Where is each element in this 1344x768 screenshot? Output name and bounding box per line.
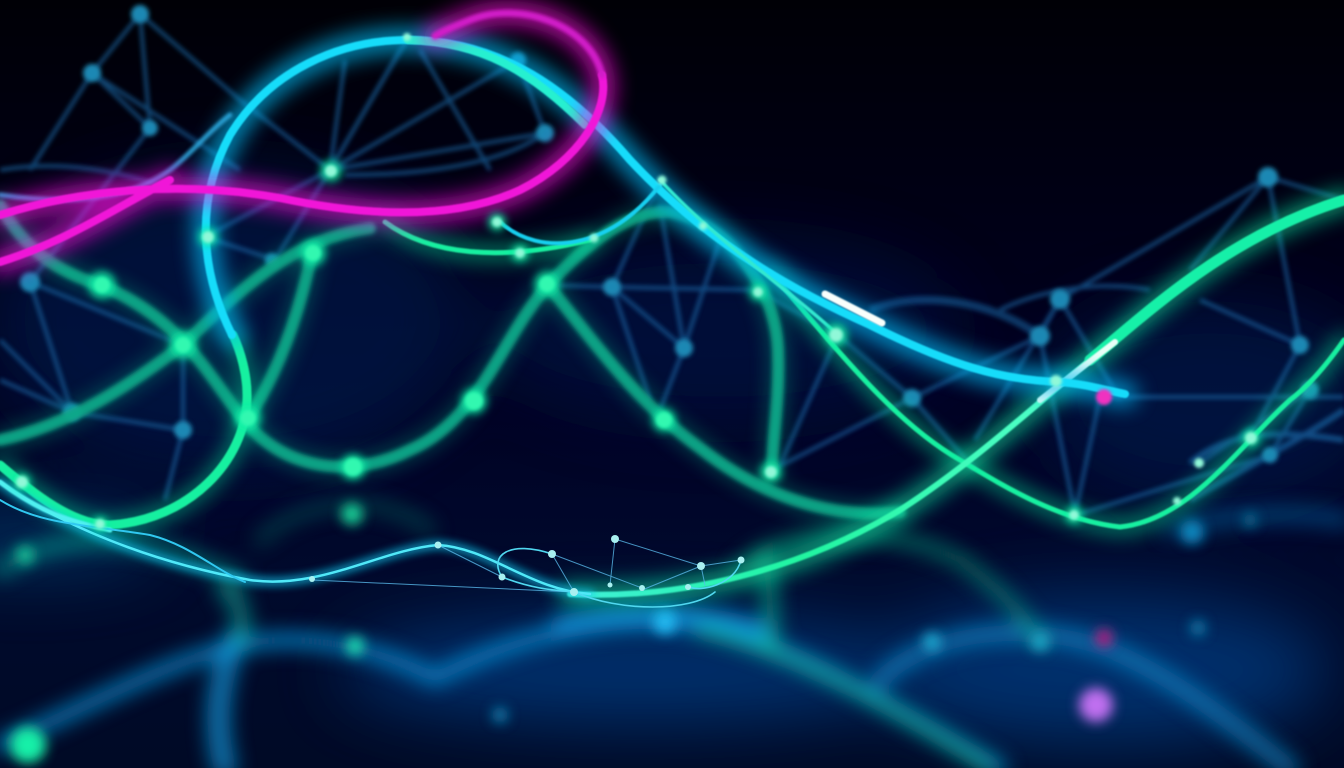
teal ribbons: [0, 205, 900, 513]
green glow: [0, 222, 1344, 527]
magenta node: [1096, 389, 1112, 405]
node highlights: [16, 33, 1257, 529]
background wireframe network: [0, 14, 1344, 515]
thin bright cyan lower strand: [0, 482, 590, 594]
node halos: [13, 160, 1260, 532]
ribbon core: [0, 205, 900, 513]
magenta ribbon: [0, 13, 603, 262]
node cores: [94, 245, 672, 476]
green core: [0, 222, 1344, 527]
cyan main ribbon: [0, 40, 1125, 394]
reflection: blurred nodes: [10, 503, 1257, 763]
ambient glow: [0, 170, 1344, 745]
glowing nodes: [13, 33, 1260, 532]
bright green sweeping ribbon: [570, 200, 1344, 595]
reflection: blue wave: [0, 505, 1344, 768]
floor reflection: [0, 503, 1344, 768]
small foreground network: [309, 535, 744, 607]
background wireframe nodes: [20, 5, 1319, 463]
green ribbons: [0, 222, 1344, 527]
small network nodes: [309, 535, 744, 596]
ribbon glow: [0, 205, 900, 513]
